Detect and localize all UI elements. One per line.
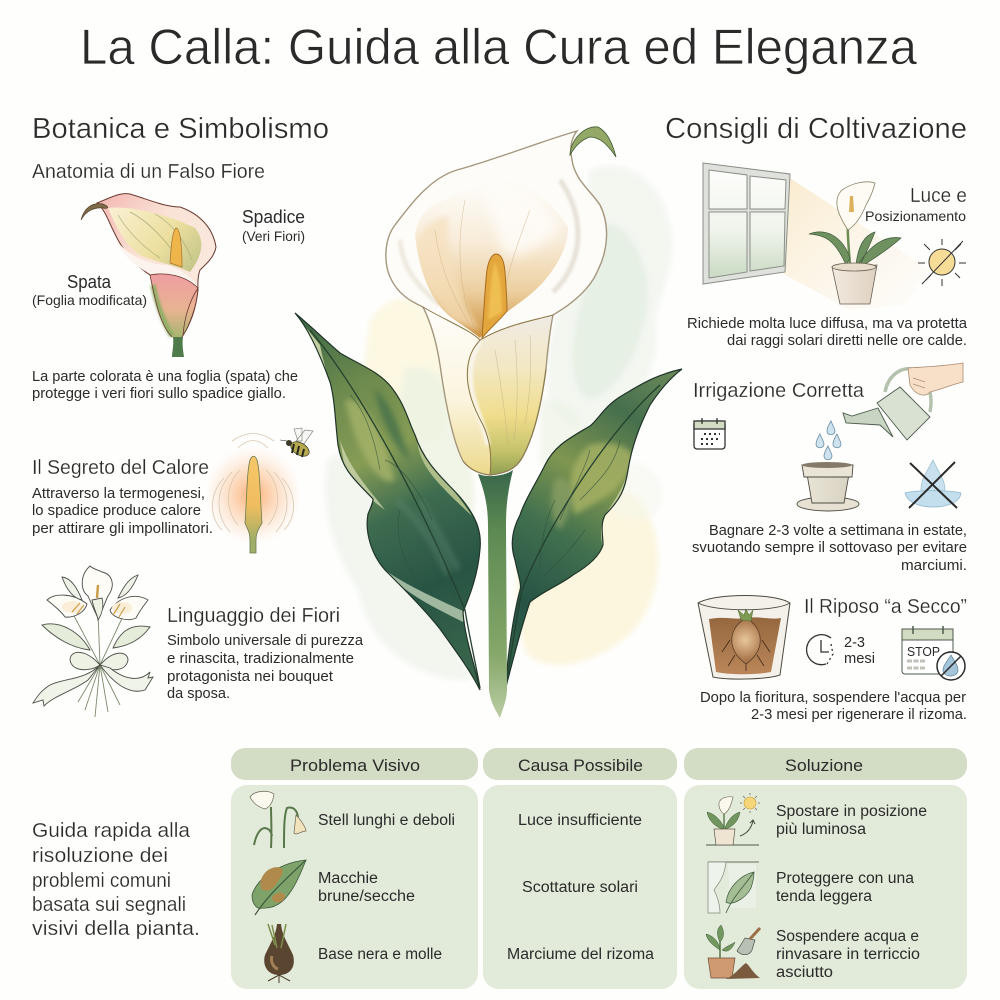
column: Problema Visivo [231, 748, 478, 989]
section: Linguaggio dei Fiori [33, 566, 364, 717]
text: Luce insufficiente [518, 812, 642, 829]
text block: protegge i veri fiori sullo spadice giallo. [32, 386, 286, 402]
text block: svuotando sempre il sottovaso per evitare [692, 540, 967, 556]
text block: Bagnare 2-3 volte a settimana in estate, [709, 523, 967, 539]
intro text: guida rapida: problemi comuni [32, 870, 171, 892]
section: Il Riposo a Secco [698, 596, 967, 723]
stem [478, 470, 513, 718]
subheading: Irrigazione Corretta [693, 380, 865, 402]
label: 2-3 mesi: mesi [844, 651, 875, 667]
icon: clock [807, 635, 833, 665]
central calla lily illustration [295, 127, 682, 718]
subheading: Il Segreto del Calore [32, 457, 209, 479]
heading: Luce e Posizionamento: Luce e [910, 185, 967, 207]
icon: potted calla [809, 182, 901, 304]
subheading: Il Riposo “a Secco” [804, 596, 967, 618]
intro text: guida rapida: risoluzione dei [32, 845, 168, 867]
icon: pot with saucer [797, 462, 859, 511]
header [684, 748, 967, 780]
text block: La parte colorata è una foglia (spata) che [32, 369, 298, 385]
icon: crossed sun [918, 239, 966, 286]
icon: pot with rhizome [698, 596, 790, 679]
heading: Consigli di Coltivazione: Consigli di Coltivazione [665, 113, 967, 145]
text block [687, 316, 968, 349]
icon: pink calla anatomy [81, 194, 216, 357]
text [776, 928, 920, 981]
label: Spadice: (Veri Fiori) [242, 228, 305, 244]
text block: dai raggi solari diretti nelle ore calde. [727, 333, 967, 349]
subheading: Linguaggio dei Fiori [167, 605, 340, 627]
text block: e rinascita, tradizionalmente [167, 651, 354, 667]
text block: lo spadice produce calore [32, 503, 201, 519]
title: La Calla: Guida alla Cura ed Eleganza [80, 19, 917, 75]
text block [692, 523, 967, 574]
text: Base nera e molle [318, 946, 442, 963]
icon: calendar [694, 418, 725, 449]
text [318, 870, 415, 905]
intro text: guida rapida: basata sui segnali [32, 894, 186, 916]
intro text: guida rapida: visivi della pianta. [32, 918, 200, 940]
header: Problema Visivo [290, 757, 420, 775]
text: Spostare in posizione [776, 803, 927, 820]
text: Marciume del rizoma [507, 946, 654, 963]
icon: rotten bulb [264, 924, 294, 983]
text block: Dopo la fioritura, sospendere l'acqua per [700, 690, 966, 706]
section: Anatomia di un Falso Fiore [32, 161, 305, 402]
label: Spadice: Spadice [242, 207, 305, 227]
intro text: guida rapida: Guida rapida alla [32, 820, 191, 842]
icon: curtain and leaf [708, 862, 759, 913]
icon: bee [280, 428, 313, 459]
section: Il Segreto del Calore [32, 428, 313, 553]
text: Macchie [318, 870, 378, 887]
icon: STOP calendar [902, 626, 965, 680]
text: più luminosa [776, 821, 866, 838]
header [483, 748, 677, 780]
text [776, 870, 914, 905]
text: asciutto [776, 964, 833, 981]
header: Soluzione [785, 757, 863, 775]
label: 2-3 mesi: 2-3 [844, 635, 865, 651]
column: Causa Possibile [483, 748, 677, 989]
label: Spadice [242, 207, 305, 244]
label: 2-3 mesi [844, 635, 875, 667]
panel [483, 785, 677, 989]
text: Proteggere con una [776, 870, 914, 887]
text block [32, 369, 298, 402]
heading: Luce e Posizionamento: Posizionamento [865, 208, 966, 224]
text block: protagonista nei bouquet [167, 669, 333, 685]
text: rinvasare in terriccio [776, 946, 920, 963]
header: Causa Possibile [518, 757, 643, 775]
icon: STOP calendar: STOP [907, 644, 940, 659]
column: Soluzione [684, 748, 967, 989]
text [776, 803, 927, 838]
label: Spata: Spata [67, 272, 112, 292]
section: Luce e Posizionamento [687, 163, 968, 349]
icon: repotting tools [706, 925, 760, 979]
right leaf [505, 369, 682, 690]
icon: warm spadix with heat waves [207, 434, 299, 553]
text block [32, 486, 213, 537]
text block [167, 633, 364, 702]
heading: Botanica e Simbolismo: Botanica e Simbolismo [32, 113, 329, 145]
text block: marciumi. [901, 558, 967, 574]
panel [684, 785, 967, 989]
icon: bridal bouquet [33, 566, 153, 717]
text block [700, 690, 967, 723]
section: Irrigazione Corretta [692, 363, 967, 574]
label: Spata [32, 272, 147, 308]
icon: window [703, 163, 790, 284]
icon: crossed water drop in saucer [905, 460, 961, 508]
icon: drooping stems [250, 791, 306, 848]
text block: da sposa. [167, 686, 230, 702]
watercolor wash behind flower [325, 166, 672, 680]
icon: plant moved to light [706, 793, 760, 845]
subheading: Anatomia di un Falso Fiore [32, 161, 265, 183]
spathe tip curl [570, 127, 616, 157]
icon: water drops [816, 421, 841, 460]
text: Scottature solari [522, 879, 638, 896]
panel [231, 785, 478, 989]
icon: hand with watering can [843, 363, 963, 440]
text block: 2-3 mesi per rigenerare il rizoma. [751, 707, 967, 723]
icon: light beams [780, 178, 930, 310]
text block: Simbolo universale di purezza [167, 633, 364, 649]
text block: Richiede molta luce diffusa, ma va protetta [687, 316, 968, 332]
label: Spata: (Foglia modificata) [32, 292, 147, 308]
text: Sospendere acqua e [776, 928, 919, 945]
spadix [482, 254, 507, 338]
text: brune/secche [318, 888, 415, 905]
left leaf [295, 313, 480, 690]
text block: Attraverso la termogenesi, [32, 486, 205, 502]
text: tenda leggera [776, 888, 872, 905]
header [231, 748, 478, 780]
heading: Luce e Posizionamento [865, 185, 967, 224]
icon: burnt leaf [252, 860, 306, 915]
text block: per attirare gli impollinatori. [32, 521, 213, 537]
table: problem, cause, solution [231, 748, 967, 989]
spathe [386, 131, 607, 475]
intro text: guida rapida [32, 820, 200, 940]
text: Stell lunghi e deboli [318, 812, 455, 829]
